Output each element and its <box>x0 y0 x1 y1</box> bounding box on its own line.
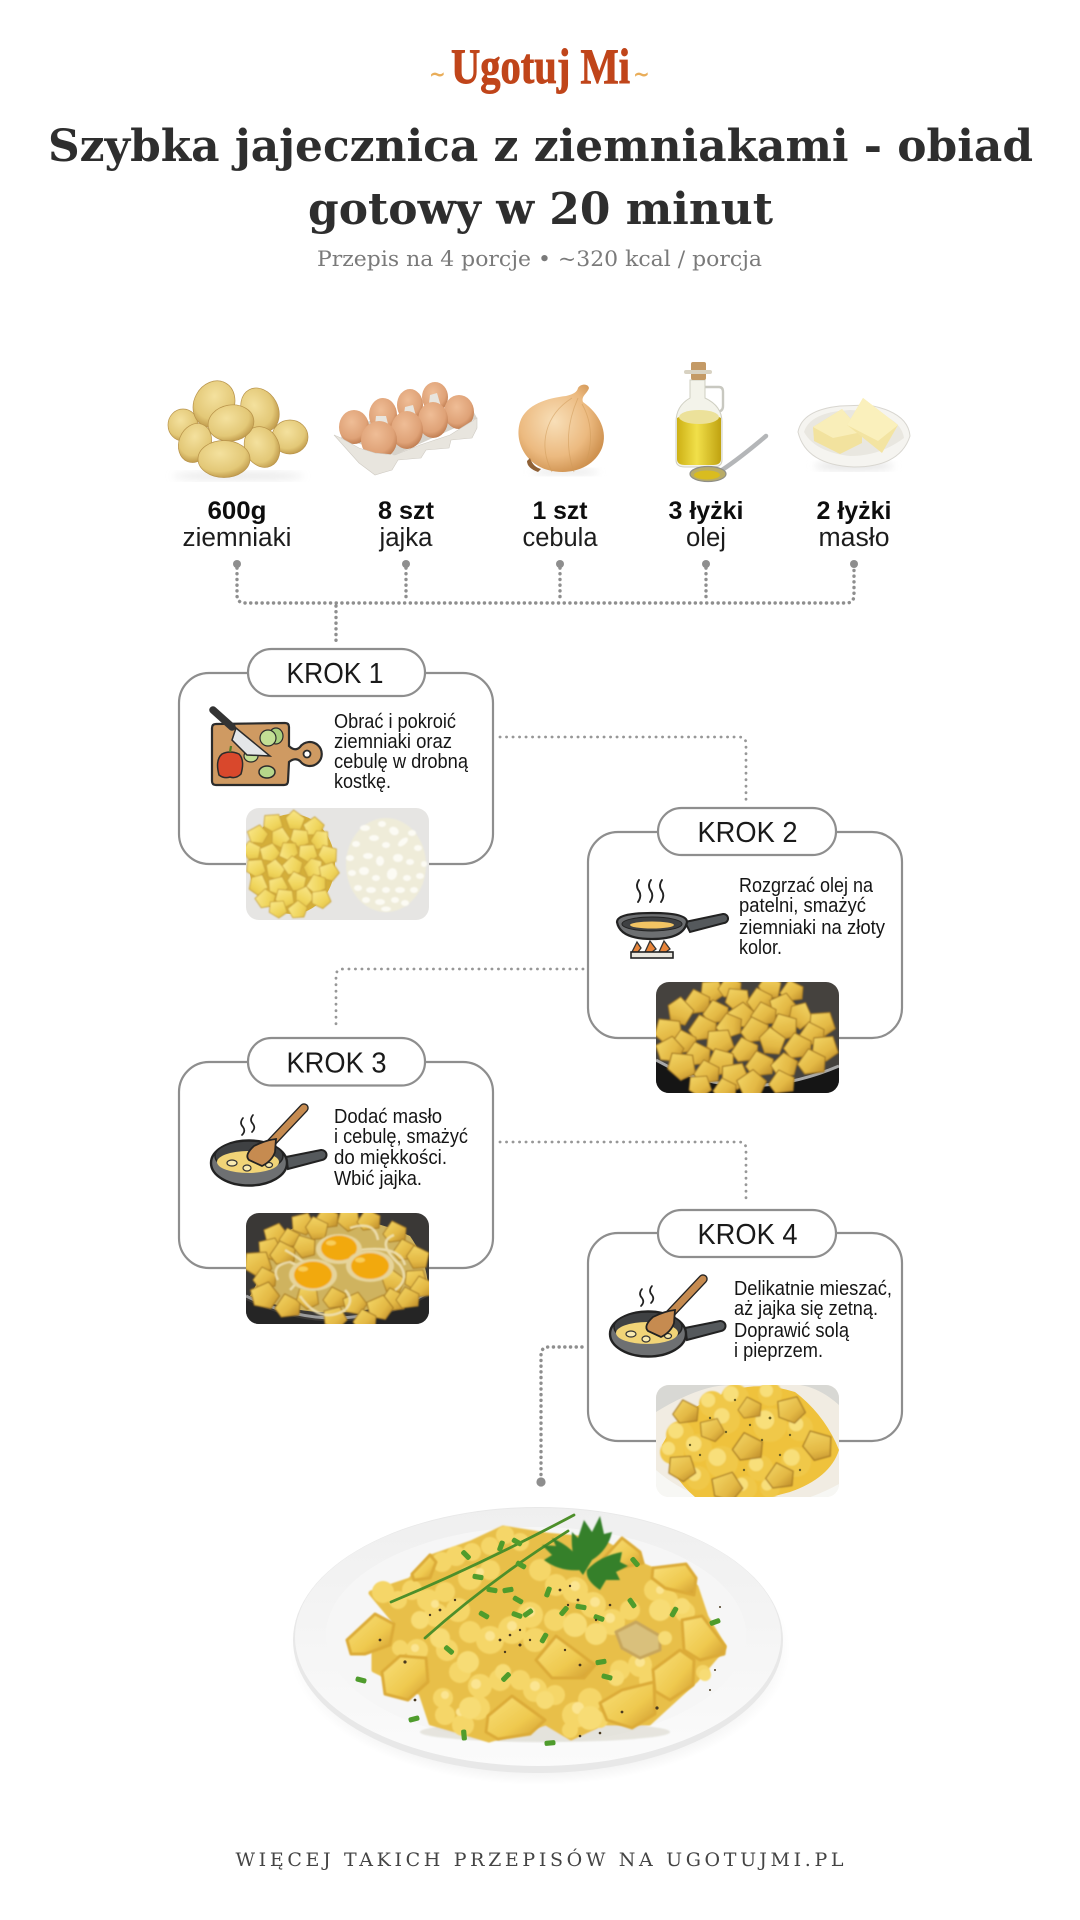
title: Szybka jajecznica z ziemniakami - obiad <box>48 121 1033 172</box>
icon: stirring pan with eggs <box>610 1279 726 1356</box>
instruction text: i cebulę, smażyć <box>334 1126 468 1148</box>
step badge: KROK 2 <box>698 817 798 849</box>
step badge: KROK 1 <box>286 658 384 690</box>
chive bits <box>355 1537 721 1746</box>
step badge <box>658 1210 836 1257</box>
icon: stirring pan <box>211 1108 327 1186</box>
icon: potatoes <box>168 373 308 480</box>
instruction text: patelni, smażyć <box>739 895 866 917</box>
label: eggs <box>378 497 435 552</box>
panel: step 4 <box>588 1210 902 1505</box>
potato chunks <box>347 1538 725 1739</box>
label: onion <box>522 497 598 552</box>
label: eggs: jajka <box>378 524 433 552</box>
instruction text: kostkę. <box>334 771 391 793</box>
chives <box>391 1515 574 1638</box>
step badge <box>248 649 425 696</box>
title: gotowy w 20 minut <box>308 184 774 235</box>
icon: olive oil bottle and spoon <box>676 362 766 482</box>
icon: pan on burner <box>617 880 728 958</box>
instruction text <box>334 1106 468 1190</box>
instruction text: ziemniaki na złoty <box>739 917 885 939</box>
panel: step 1 <box>179 649 493 922</box>
label: potatoes: ziemniaki <box>182 524 292 552</box>
step badge: KROK 3 <box>286 1048 386 1080</box>
label: butter <box>816 497 892 552</box>
icon: cutting board <box>212 710 322 785</box>
label: onion: cebula <box>522 524 598 552</box>
label: potatoes <box>182 497 292 552</box>
instruction text: i pieprzem. <box>734 1340 823 1362</box>
footer: WIĘCEJ TAKICH PRZEPISÓW NA UGOTUJMI.PL <box>236 1848 844 1871</box>
icon: onion <box>518 385 604 475</box>
panel: step 3 <box>179 1038 493 1330</box>
instruction text <box>739 875 885 959</box>
panel: step 2 <box>588 808 902 1101</box>
subtitle: Przepis na 4 porcje • ~320 kcal / porcja <box>317 247 762 272</box>
connector: step 1 to step 2 <box>500 737 746 800</box>
label: potatoes: 600g <box>208 497 266 525</box>
instruction text: cebulę w drobną <box>334 751 469 773</box>
connector: ingredients to step 1 <box>233 560 858 642</box>
instruction text: Rozgrzać olej na <box>739 875 874 897</box>
instruction text: Wbić jajka. <box>334 1168 422 1190</box>
step badge <box>658 808 836 855</box>
final dish: plate of scrambled eggs with potatoes <box>290 1507 790 1785</box>
connector: step 2 to step 3 <box>336 969 583 1030</box>
icon: butter on dish <box>798 398 910 470</box>
label: oil <box>668 497 744 552</box>
food mound <box>371 1526 724 1742</box>
photo: scrambled eggs with potatoes in bowl <box>656 1382 839 1505</box>
label: onion: 1 szt <box>532 497 588 525</box>
photo: diced potatoes and onion <box>240 808 429 922</box>
instruction text <box>334 711 469 793</box>
step badge <box>248 1038 425 1086</box>
logo: ~ <box>633 62 650 86</box>
instruction text: Obrać i pokroić <box>334 711 456 733</box>
connector: step 4 to final dish <box>536 1347 582 1487</box>
label: eggs: 8 szt <box>378 497 435 525</box>
instruction text: do miękkości. <box>334 1147 447 1169</box>
logo: ~ <box>429 62 446 86</box>
title <box>48 121 1033 235</box>
instruction text: aż jajka się zetną. <box>734 1298 878 1320</box>
connector: step 3 to step 4 <box>500 1142 746 1203</box>
label: oil: 3 łyżki <box>668 497 744 525</box>
icon: eggs in carton <box>334 382 477 475</box>
instruction text: Doprawić solą <box>734 1320 850 1342</box>
photo: potatoes with eggs and onion <box>246 1213 429 1324</box>
instruction text: Delikatnie mieszać, <box>734 1278 892 1300</box>
step badge: KROK 4 <box>698 1219 798 1251</box>
egg curds over potatoes <box>411 1598 711 1730</box>
instruction text: Dodać masło <box>334 1106 442 1128</box>
label: butter: 2 łyżki <box>816 497 892 525</box>
black pepper <box>379 1585 721 1737</box>
instruction text <box>734 1278 892 1362</box>
plate <box>290 1507 790 1785</box>
instruction text: ziemniaki oraz <box>334 731 452 753</box>
panel: ingredients <box>168 362 910 552</box>
logo: Ugotuj Mi <box>451 38 630 94</box>
instruction text: kolor. <box>739 937 782 959</box>
label: oil: olej <box>686 524 726 552</box>
photo: fried potatoes in pan <box>656 982 839 1093</box>
parsley <box>542 1516 628 1590</box>
label: butter: masło <box>818 524 890 552</box>
